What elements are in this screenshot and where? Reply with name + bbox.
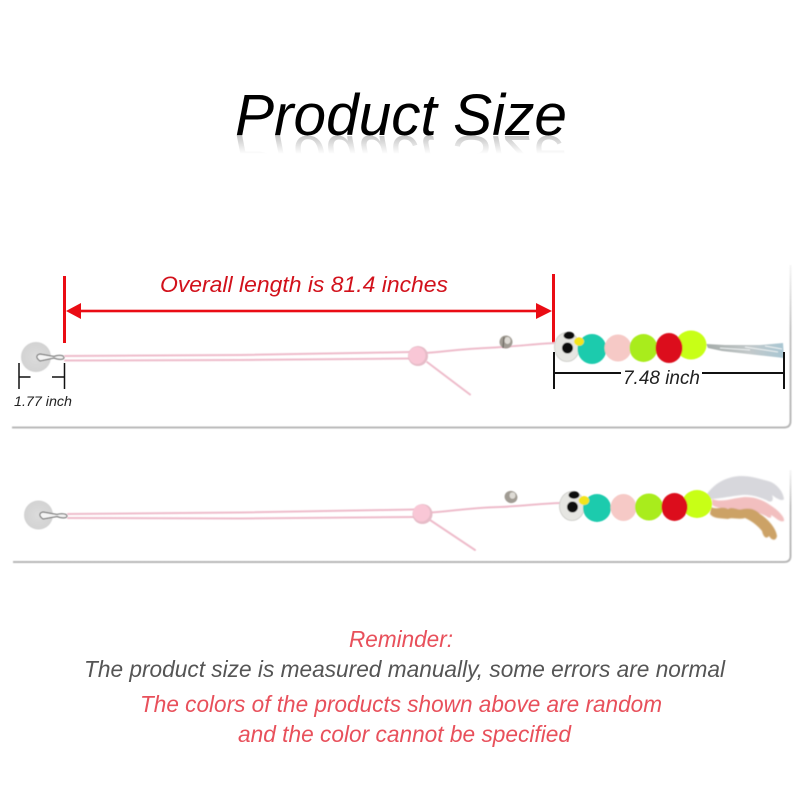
icon: suction cup (21, 342, 64, 372)
icon: ribbon tail (706, 343, 784, 358)
reminder text block (84, 626, 726, 747)
icon: feathers (707, 476, 784, 540)
label: overall length: Overall length is 81.4 inches (160, 272, 448, 297)
string loop (68, 503, 562, 550)
icon: suction cup (24, 500, 67, 530)
title (235, 83, 567, 188)
note: measurement: The product size is measured manually, some errors are normal (84, 656, 726, 682)
label: toy length: 7.48 inch (623, 367, 700, 389)
reminder heading: Reminder: (349, 626, 453, 652)
icon: pink slider bead (412, 504, 432, 524)
string loop (65, 343, 556, 394)
toy: top, ribbon tail version (21, 330, 784, 394)
brown feather (710, 507, 777, 540)
dimension: suction cup width (14, 363, 72, 409)
icon: bell (503, 489, 519, 505)
title: Product Size (235, 123, 567, 188)
panel: top product card (12, 265, 790, 428)
title: Product Size (235, 83, 567, 148)
icon: bell (497, 333, 515, 351)
icon: pink slider bead (408, 346, 428, 366)
toy: bottom, feather tail version (24, 476, 784, 550)
note: colors line 2: and the color cannot be specified (238, 721, 572, 747)
label: cup width: 1.77 inch (14, 393, 72, 409)
dimension: overall length (63, 272, 555, 343)
pink feather (712, 497, 784, 521)
note: colors line 1: The colors of the products shown above are random (140, 691, 662, 717)
panel: bottom product card (13, 470, 790, 562)
gray feather (707, 476, 784, 502)
dimension: toy length (554, 352, 784, 389)
icon: caterpillar body (554, 330, 706, 364)
icon: caterpillar body (560, 490, 712, 522)
